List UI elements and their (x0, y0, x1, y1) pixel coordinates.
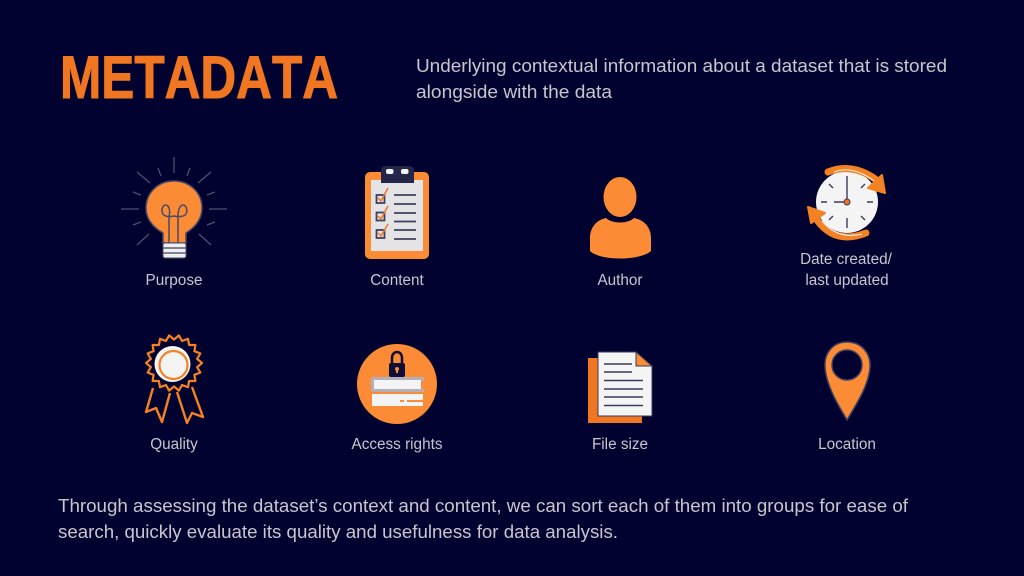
label: Access rights: Access rights (352, 436, 443, 453)
icon: author silhouette (590, 177, 651, 258)
label: Date created / last updated: Date created/ (800, 251, 893, 268)
label: Location: Location (818, 436, 876, 453)
subtitle text block (416, 56, 947, 102)
label: Date created / last updated (800, 251, 893, 289)
icon: location pin (825, 342, 870, 420)
icon: clock with refresh arrows (808, 169, 885, 237)
label: Purpose: Purpose (146, 272, 202, 289)
icon: clipboard checklist (365, 166, 429, 259)
icon: locked books (357, 344, 437, 424)
label: File size: File size (592, 436, 648, 453)
subtitle text block: Underlying contextual information about a dataset that is stored (416, 56, 947, 76)
footer text block (58, 496, 909, 542)
footer text block: Through assessing the dataset’s context and content, we can sort each of them into groups for ease of (58, 496, 909, 516)
subtitle text block: alongside with the data (416, 82, 613, 102)
label: Content: Content (370, 272, 425, 289)
title: METADATA (60, 44, 338, 111)
icon: light bulb (121, 157, 227, 258)
label: Date created / last updated: last updated (805, 272, 889, 289)
footer text block: search, quickly evaluate its quality and usefulness for data analysis. (58, 522, 618, 542)
icon: quality rosette (146, 335, 203, 423)
label: Author: Author (597, 272, 643, 289)
icon: file document (588, 352, 652, 423)
label: Quality: Quality (150, 436, 198, 453)
